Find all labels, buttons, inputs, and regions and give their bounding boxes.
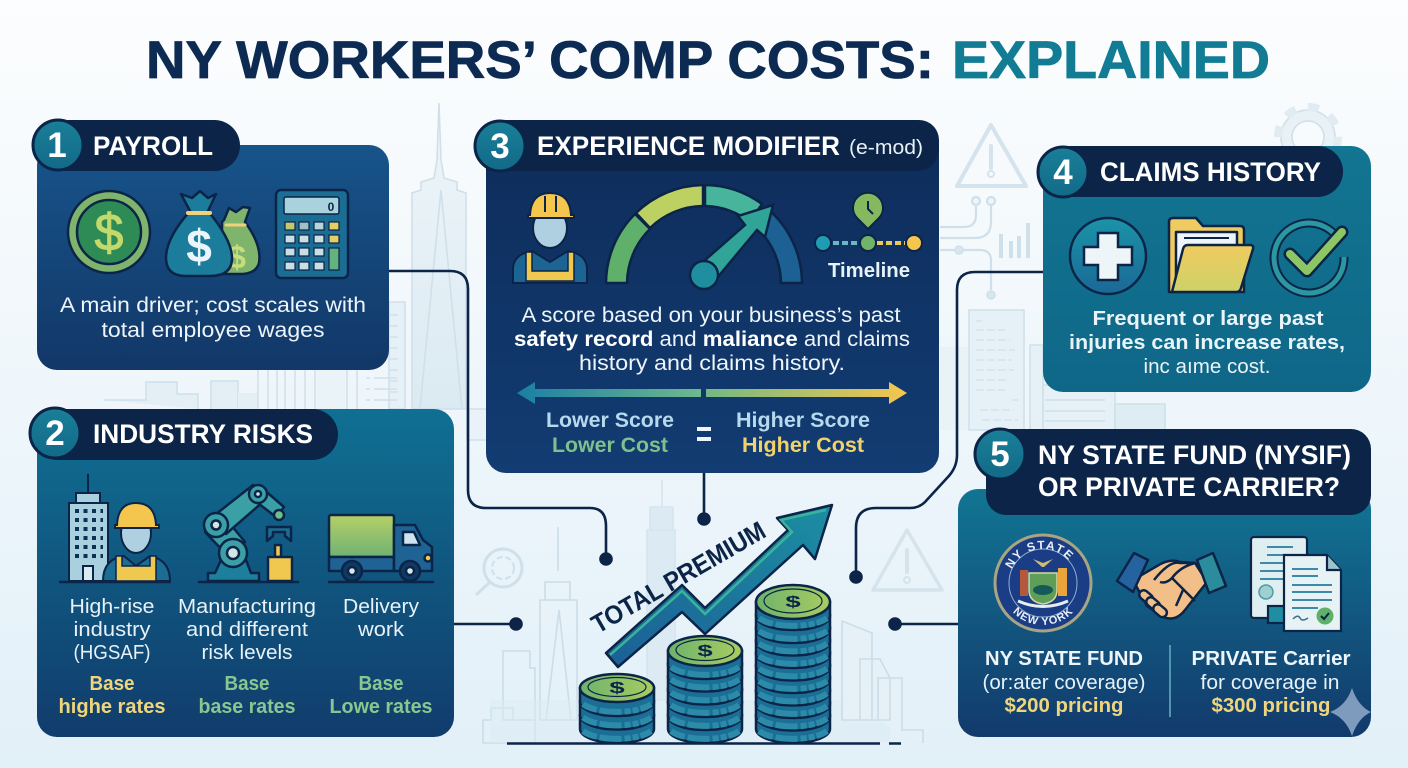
text: manufacturing rates: base rates: [198, 696, 296, 718]
icon: delivery truck: [329, 515, 433, 582]
icon: New York seal: NY STATE: [1005, 540, 1074, 569]
text: high-rise rates: Base: [90, 673, 134, 695]
text: e-mod description: safety record and maliance and claims: [514, 328, 910, 351]
heading: claims history: CLAIMS HISTORY: [1100, 157, 1321, 187]
connector: claims history to total premium: [850, 272, 1043, 582]
text: delivery rates: Base: [358, 673, 404, 695]
coin stack: large: [756, 585, 830, 743]
text: NY state fund: (or:ater coverage): [982, 672, 1146, 694]
icon: robot arm: [199, 485, 298, 582]
icon: timeline: Timeline: [828, 260, 910, 282]
title: EXPLAINED: [952, 31, 1270, 90]
text: NY state fund: [982, 648, 1146, 717]
heading: state fund or private carrier: NY STATE FUND (NYSIF): [1038, 440, 1351, 470]
text: delivery rates: Lowe rates: [330, 696, 432, 718]
equals sign: [697, 427, 711, 441]
icon: documents: [1251, 537, 1341, 631]
coin stack: small: $: [609, 679, 625, 697]
text: payroll description: total employee wages: [102, 319, 324, 342]
coin stack: small: [580, 674, 654, 743]
panel: claims history: [1037, 146, 1371, 392]
text: higher score, higher cost: Higher Cost: [742, 434, 864, 457]
heading: experience modifier: [475, 120, 939, 171]
text: NY state fund: $200 pricing: [1004, 695, 1124, 717]
text: high-rise rates: High-rise: [70, 596, 154, 618]
heading: industry risks: [30, 408, 338, 460]
text: higher score, higher cost: Higher Score: [736, 409, 870, 432]
connector: state fund to total premium: [890, 618, 958, 630]
text: high-rise rates: industry: [74, 619, 150, 641]
connector: experience modifier to total premium: [698, 473, 710, 524]
text: high-rise rates: (HGSAF): [74, 642, 150, 664]
text: manufacturing rates: Manufacturing: [178, 596, 316, 618]
heading: state fund or private carrier: [975, 429, 1371, 515]
panel: experience modifier: [475, 120, 939, 473]
text: claims description: injuries can increase rates,: [1069, 332, 1345, 354]
icon: calculator: 0: [328, 200, 335, 214]
text: delivery rates: [330, 596, 432, 718]
panel: industry risks: [30, 408, 454, 737]
text: NY state fund: NY STATE FUND: [985, 648, 1143, 670]
text: private carrier: [1192, 648, 1351, 717]
icon: folder: [1169, 218, 1253, 292]
icon: check mark: [1274, 223, 1344, 293]
connector: industry risks to total premium: [454, 618, 522, 630]
text: private carrier: PRIVATE Carrier: [1192, 648, 1351, 670]
text: e-mod description: A score based on your business’s past: [522, 304, 901, 327]
arrow: rising premium: [606, 505, 832, 667]
label: total premium: TOTAL PREMIUM: [586, 515, 771, 639]
heading: state fund or private carrier: OR PRIVATE CARRIER?: [1038, 472, 1340, 502]
text: private carrier: $300 pricing: [1212, 695, 1330, 717]
icon: New York seal: [994, 534, 1092, 632]
text: payroll description: [60, 294, 366, 342]
panel: payroll: [32, 120, 389, 370]
text: high-rise rates: [58, 596, 166, 718]
ground line: [507, 742, 901, 745]
arrow: higher direction: [706, 382, 907, 404]
icon: timeline: [815, 193, 922, 282]
heading: industry risks: 2: [45, 414, 65, 453]
heading: experience modifier: EXPERIENCE MODIFIER: [537, 131, 840, 161]
text: manufacturing rates: [178, 596, 316, 718]
icon: money bags: $: [186, 220, 212, 272]
coin stack: medium: [668, 636, 742, 743]
text: delivery rates: Delivery: [343, 596, 419, 618]
text: lower score, lower cost: Lower Cost: [552, 434, 668, 457]
heading: experience modifier: 3: [490, 127, 510, 166]
divider: [1169, 645, 1171, 717]
panel: state fund or private carrier: [958, 428, 1371, 737]
text: claims description: [1069, 308, 1345, 378]
coin stack: large: $: [785, 593, 801, 611]
icon: handshake: [1117, 553, 1226, 619]
text: delivery rates: work: [357, 619, 405, 641]
icon: dollar coin: $: [95, 204, 124, 262]
heading: payroll: PAYROLL: [93, 131, 213, 161]
text: manufacturing rates: risk levels: [202, 642, 292, 664]
text: manufacturing rates: Base: [224, 673, 270, 695]
arrow: lower direction: [517, 382, 701, 404]
icon: money bags: [166, 191, 259, 276]
icon: calculator: [276, 190, 348, 278]
text: lower score, lower cost: [546, 409, 674, 457]
background skyline and icons: [104, 103, 1338, 743]
title: NY WORKERS’ COMP COSTS:: [146, 31, 934, 90]
heading: state fund or private carrier: 5: [990, 435, 1010, 474]
connector: payroll to total premium: [389, 271, 612, 564]
icon: high-rise and worker: [59, 474, 171, 582]
text: claims description: inc aıme cost.: [1144, 356, 1270, 378]
text: private carrier: for coverage in: [1200, 672, 1340, 694]
heading: payroll: 1: [47, 126, 67, 165]
icon: dollar coin: [68, 191, 150, 273]
icon: New York seal: NEW YORK: [1013, 606, 1073, 625]
text: e-mod description: history and claims history.: [579, 352, 845, 375]
text: claims description: Frequent or large past: [1092, 308, 1324, 330]
heading: claims history: 4: [1053, 153, 1073, 192]
heading: experience modifier: (e-mod): [849, 137, 923, 159]
text: e-mod description: [514, 304, 910, 375]
gauge: [606, 185, 802, 289]
heading: payroll: [32, 120, 240, 171]
title: [146, 31, 1270, 90]
text: payroll description: A main driver; cost scales with: [60, 294, 366, 317]
text: high-rise rates: highe rates: [58, 696, 166, 718]
text: manufacturing rates: and different: [186, 619, 308, 641]
text: higher score, higher cost: [736, 409, 870, 457]
icon: money bags: $: [228, 239, 246, 275]
heading: industry risks: INDUSTRY RISKS: [93, 419, 313, 449]
coin stack: medium: $: [697, 642, 713, 660]
icon: medical cross: [1070, 218, 1146, 294]
icon: worker: [513, 193, 587, 283]
heading: claims history: [1037, 146, 1343, 197]
icon: sparkle: [1330, 688, 1371, 736]
text: lower score, lower cost: Lower Score: [546, 409, 674, 432]
